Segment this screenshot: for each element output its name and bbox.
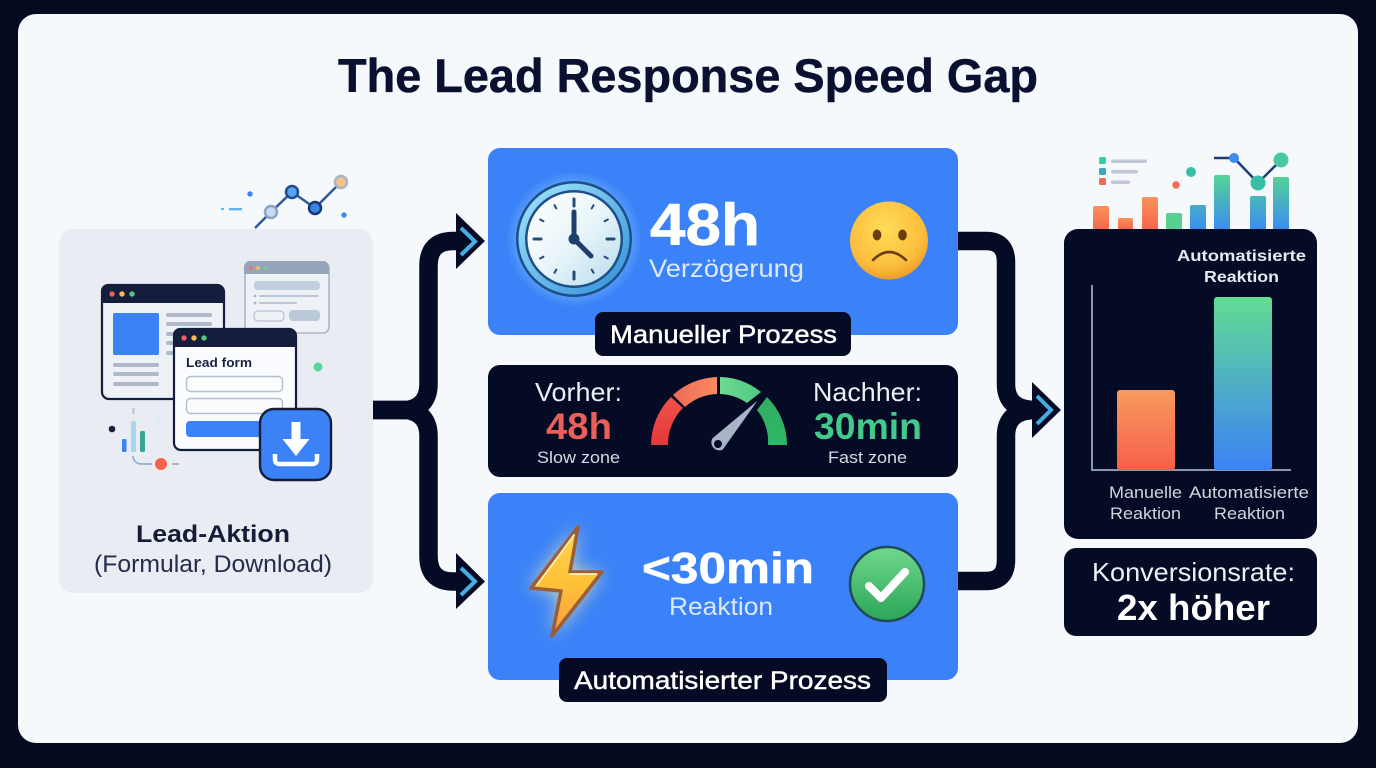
text: after: Nachher: <box>813 377 922 407</box>
text: before <box>535 377 622 467</box>
icon: main browser window <box>101 284 224 399</box>
label: automated process <box>559 658 887 702</box>
decoration: line chart above lead panel <box>221 176 347 228</box>
icon: sad face <box>850 202 928 280</box>
heading: lead action: Lead-Aktion <box>136 521 290 548</box>
text: before: 48h <box>546 406 612 447</box>
chart axes <box>1092 285 1291 470</box>
axis label: automated: Automatisierte <box>1189 483 1309 502</box>
bar: automated <box>1214 297 1272 470</box>
axis label: manual: Reaktion <box>1110 504 1181 523</box>
label: manual process <box>595 312 851 356</box>
icon: check mark <box>850 547 924 621</box>
big number: under 30 min: <30min <box>642 544 814 593</box>
icon: gauge needle <box>711 398 760 451</box>
icon: lead form window: Lead form <box>186 355 252 370</box>
decoration: mini chart above result panel <box>1093 152 1289 229</box>
text: before: Vorher: <box>535 377 622 407</box>
big number: 48h: 48h <box>650 192 760 258</box>
title: The Lead Response Speed Gap <box>338 49 1038 102</box>
text: before: Slow zone <box>537 448 620 467</box>
icon: green dot <box>314 362 322 372</box>
text: reaction label: Reaktion <box>669 593 773 621</box>
heading: automated reaction: Reaktion <box>1204 269 1279 286</box>
icon: mini bar chart <box>109 408 179 470</box>
arrow: split from lead panel to both processes <box>373 213 485 609</box>
big number: twice as high: 2x höher <box>1117 587 1270 628</box>
text: after: 30min <box>814 406 922 447</box>
text: lead action detail: (Formular, Download) <box>94 551 332 578</box>
label: manual process: Manueller Prozess <box>610 321 837 349</box>
panel: automated process <box>488 493 958 702</box>
icon: download tile <box>260 409 331 480</box>
panel: before/after gauge <box>488 365 958 477</box>
axis label: manual <box>1109 483 1182 523</box>
panel: conversion rate <box>1064 548 1317 636</box>
panel: manual process <box>488 148 958 356</box>
arrow: merge from both processes to result <box>958 241 1061 581</box>
text: conversion label: Konversionsrate: <box>1092 557 1295 587</box>
panel: lead action <box>59 229 373 593</box>
text: after: Fast zone <box>828 448 907 467</box>
icon: lead form window <box>173 328 296 450</box>
axis label: manual: Manuelle <box>1109 483 1182 502</box>
icon: background browser window <box>244 261 329 333</box>
chart: speed gauge <box>651 377 787 445</box>
axis label: automated <box>1189 483 1309 523</box>
heading: automated reaction: Automatisierte <box>1177 248 1306 265</box>
label: automated process: Automatisierter Prozess <box>574 667 871 695</box>
text: after <box>813 377 922 467</box>
icon: clock <box>506 171 642 307</box>
bar: manual <box>1117 390 1175 470</box>
heading: automated reaction <box>1177 248 1306 286</box>
icon: lightning bolt <box>531 527 602 636</box>
axis label: automated: Reaktion <box>1214 504 1285 523</box>
text: delay label: Verzögerung <box>649 255 804 283</box>
panel: result bar chart <box>1064 229 1317 539</box>
